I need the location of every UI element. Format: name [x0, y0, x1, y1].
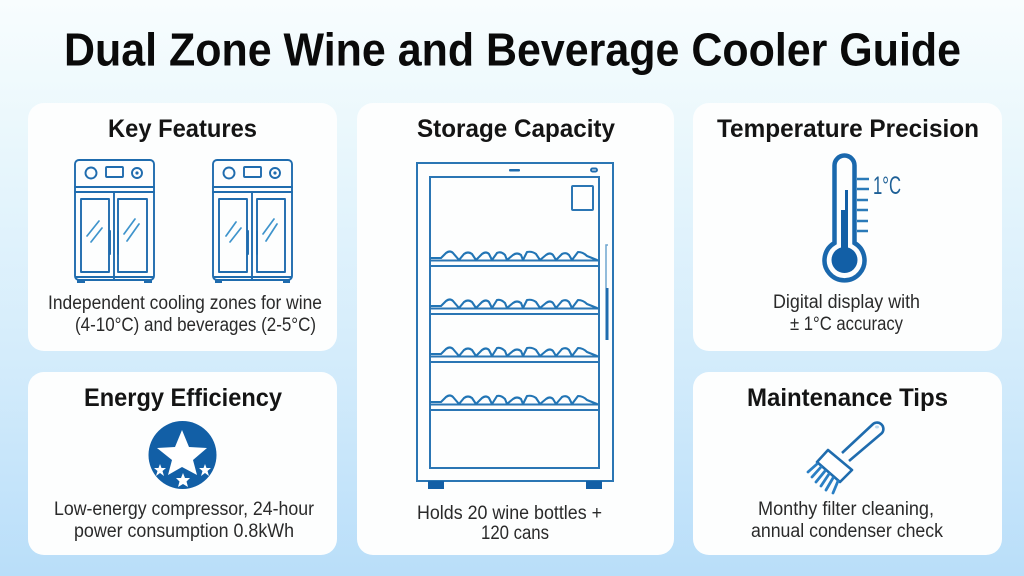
panel: temperature precision: [693, 103, 1002, 351]
icon: cooler left: [75, 160, 154, 283]
text: temperature precision: Digital display with: [773, 292, 920, 313]
icon: thermometer: [825, 156, 901, 280]
text: maintenance tips: Monthy filter cleaning,: [758, 499, 934, 520]
shelf 3: [431, 348, 598, 362]
panel: energy efficiency: [28, 372, 337, 555]
title: Dual Zone Wine and Beverage Cooler Guide: [64, 24, 961, 76]
heading: energy efficiency: Energy Efficiency: [84, 384, 282, 412]
heading: storage capacity: Storage Capacity: [417, 115, 615, 143]
icon: brush: [808, 423, 883, 493]
text: key features: Independent cooling zones for wine: [48, 293, 322, 314]
panel: temperature precision: ± 1°C accuracy: [790, 314, 903, 335]
panel: storage capacity: [357, 103, 674, 555]
label: 1°C: 1°C: [873, 172, 901, 200]
icon: cooler right: [213, 160, 292, 283]
panel: energy efficiency: power consumption 0.8kWh: [74, 521, 294, 542]
icon: star badge: [148, 421, 216, 489]
heading: key features: Key Features: [108, 115, 257, 143]
heading: maintenance tips: Maintenance Tips: [747, 384, 948, 412]
text: energy efficiency: Low-energy compressor, 24-hour: [54, 499, 315, 520]
panel: key features: [28, 103, 337, 351]
heading: temperature precision: Temperature Precision: [717, 115, 979, 143]
panel: storage capacity: 120 cans: [481, 523, 549, 544]
shelf 4: [431, 396, 598, 410]
icon: cooler with shelves: [417, 163, 613, 489]
panel: key features: (4-10°C) and beverages (2-5°C): [75, 315, 316, 336]
text: storage capacity: Holds 20 wine bottles +: [417, 503, 602, 524]
panel: maintenance tips: [693, 372, 1002, 555]
shelf 2: [431, 300, 598, 314]
panel: maintenance tips: annual condenser check: [751, 521, 943, 542]
shelf 1: [431, 252, 598, 266]
